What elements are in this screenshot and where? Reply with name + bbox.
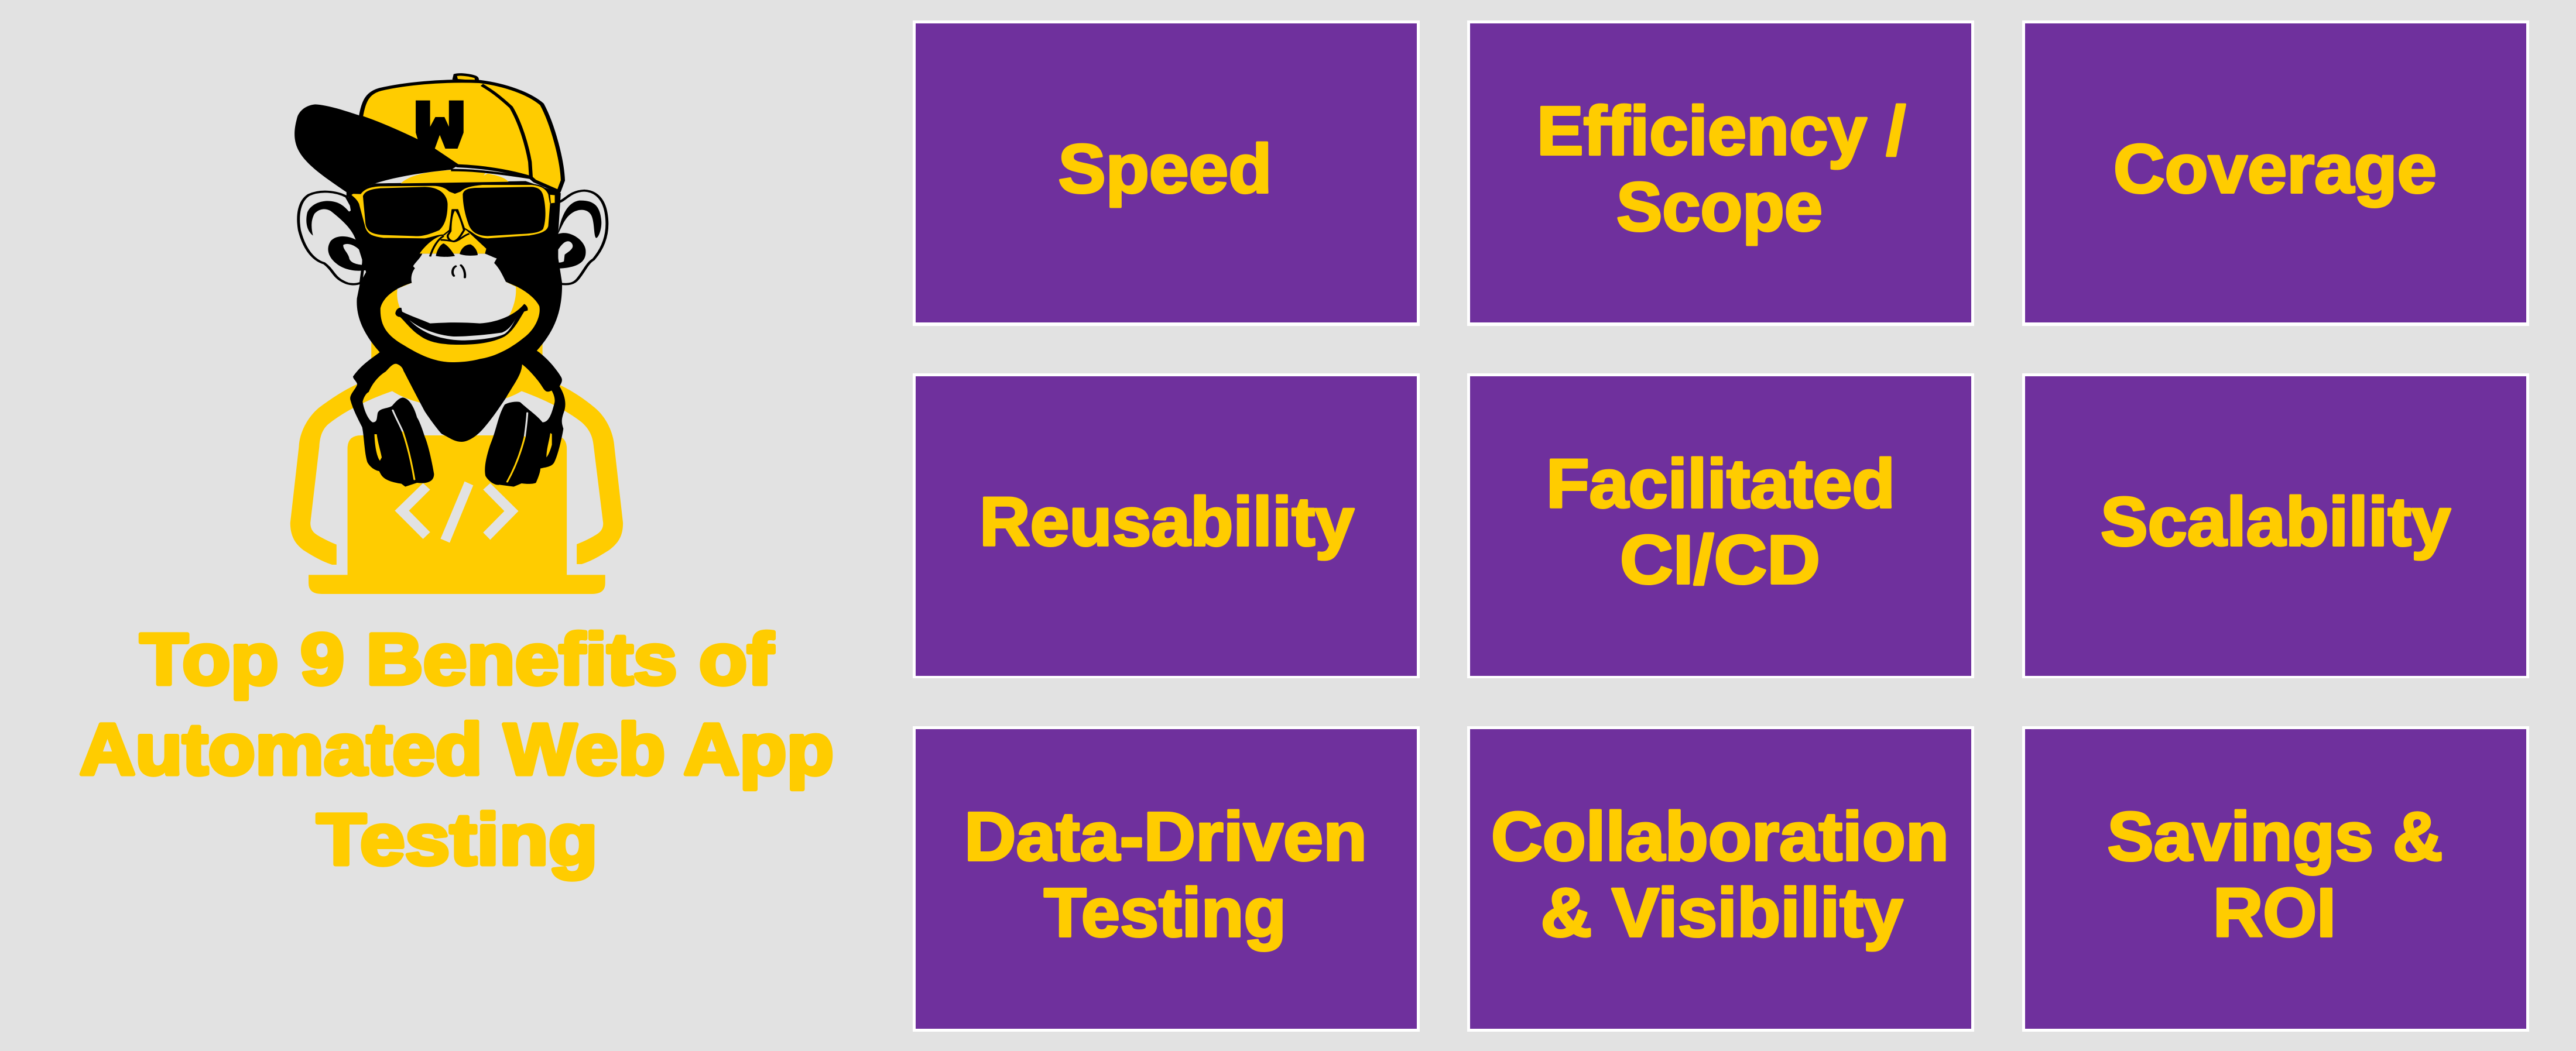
forehead xyxy=(375,170,526,183)
title: Top 9 Benefits of xyxy=(140,619,774,700)
title: Testing xyxy=(317,799,598,880)
card: Coverage xyxy=(2022,20,2529,326)
mascot: monkey with cap, sunglasses, headphones and laptop xyxy=(290,73,623,594)
card: Collaboration & Visibility xyxy=(1467,726,1974,1032)
card: Scalability: Scalability xyxy=(2101,483,2451,561)
title: Automated Web App xyxy=(80,709,834,790)
card: Reusability: Reusability xyxy=(979,483,1354,561)
card: Collaboration & Visibility: & Visibility xyxy=(1541,874,1903,952)
card: Speed: Speed xyxy=(1059,130,1272,208)
left ear xyxy=(299,192,368,284)
card: Efficiency / Scope: Efficiency / xyxy=(1537,92,1906,170)
card: Facilitated CI/CD xyxy=(1467,373,1974,678)
mouth xyxy=(395,304,528,345)
card: Coverage: Coverage xyxy=(2113,130,2437,208)
card: Facilitated CI/CD: Facilitated xyxy=(1546,445,1895,523)
shirt and arms xyxy=(290,322,623,565)
card: Scalability xyxy=(2022,373,2529,678)
card: Savings & ROI: ROI xyxy=(2213,874,2336,952)
card: Facilitated CI/CD: CI/CD xyxy=(1620,521,1820,599)
right ear xyxy=(551,191,607,284)
card: Data-Driven Testing: Data-Driven xyxy=(964,798,1367,875)
card: Collaboration & Visibility: Collaboration xyxy=(1491,798,1949,875)
card: Savings & ROI xyxy=(2022,726,2529,1032)
baseball cap xyxy=(294,73,563,198)
card: Speed xyxy=(913,20,1420,326)
headphones and beard xyxy=(350,341,566,487)
laptop xyxy=(309,435,605,594)
card: Reusability xyxy=(913,373,1420,678)
nose xyxy=(420,209,487,277)
card: Efficiency / Scope: Scope xyxy=(1616,169,1823,246)
title xyxy=(80,619,834,880)
muzzle xyxy=(381,253,540,362)
head xyxy=(348,181,562,353)
card: Data-Driven Testing: Testing xyxy=(1044,874,1286,952)
sunglasses xyxy=(349,184,556,239)
card: Efficiency / Scope xyxy=(1467,20,1974,326)
card: Data-Driven Testing xyxy=(913,726,1420,1032)
brim xyxy=(294,104,458,198)
card: Savings & ROI: Savings & xyxy=(2108,798,2443,875)
